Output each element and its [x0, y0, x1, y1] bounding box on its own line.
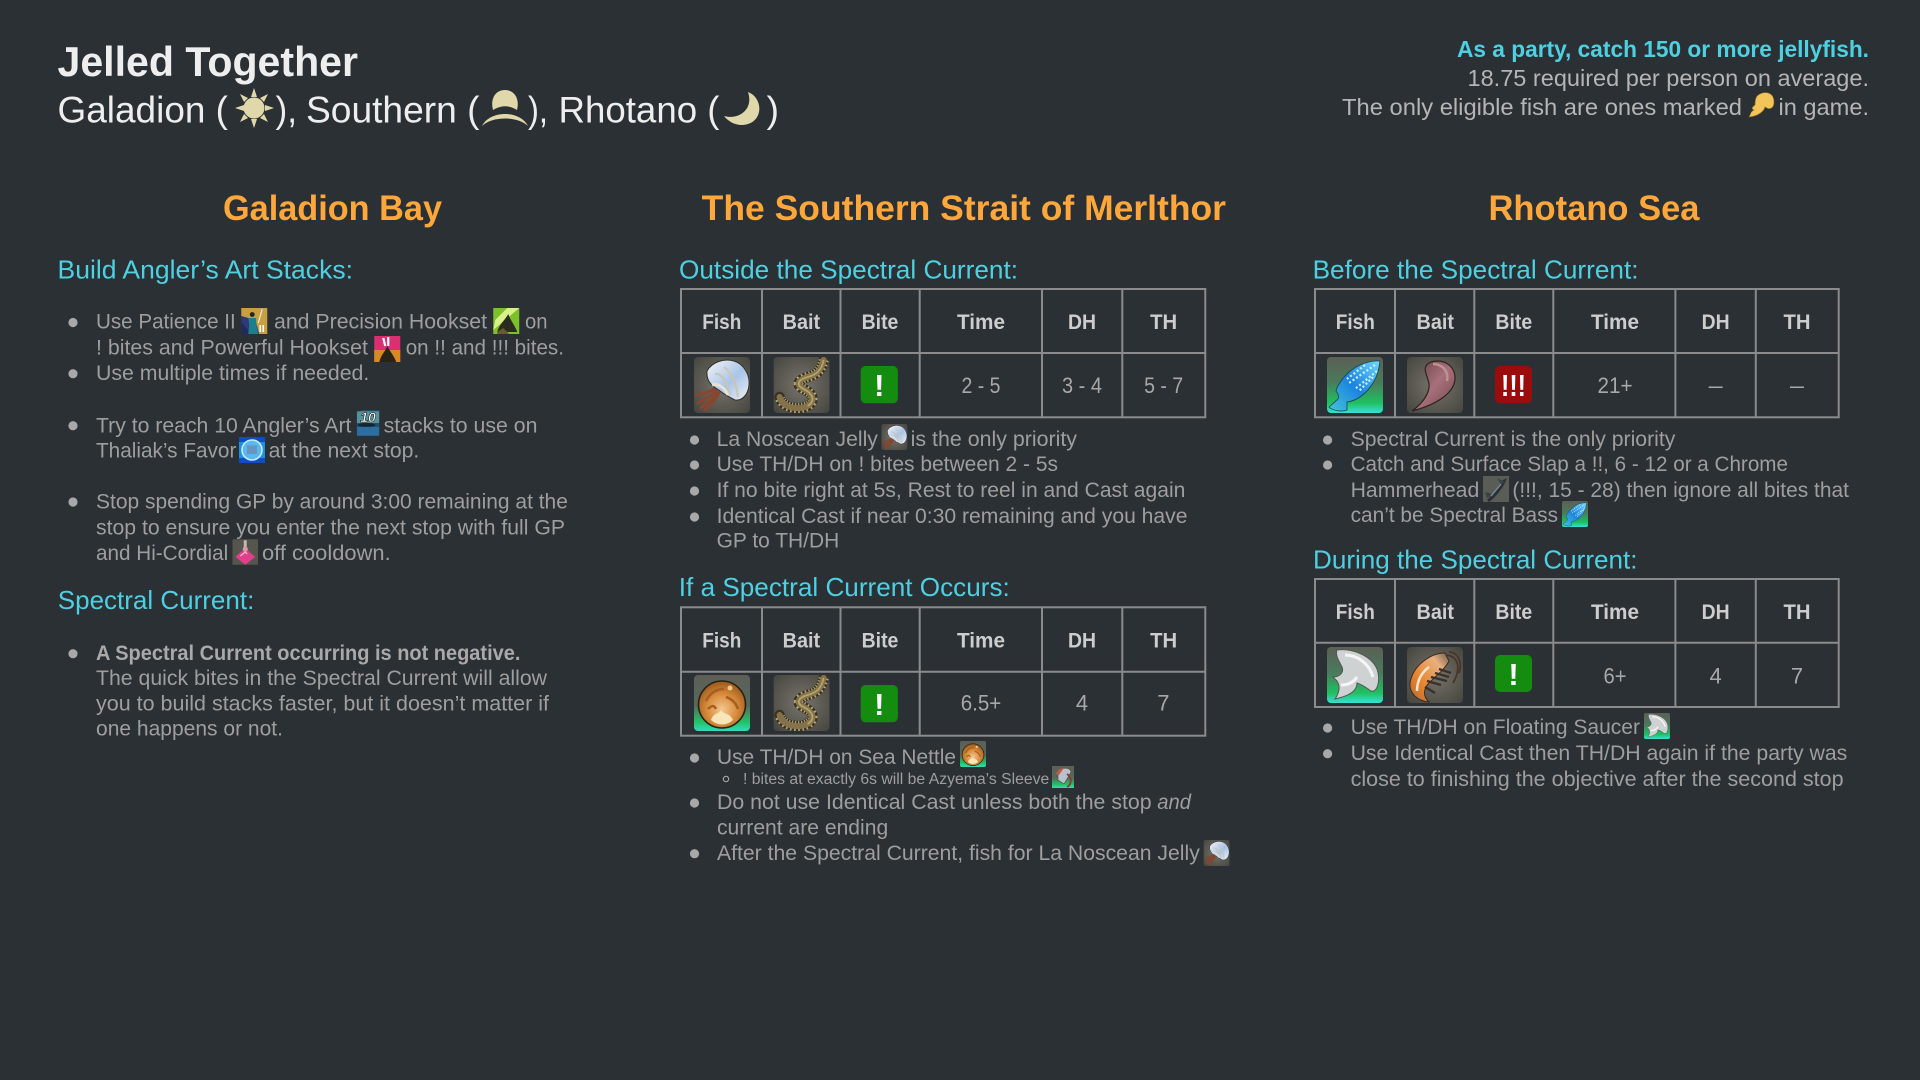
table: outside current: 3 - 4: [1062, 373, 1102, 398]
icon: light bite: !: [874, 368, 884, 403]
bullet list: during spectral current: Use TH/DH on Floating Saucer: [1351, 716, 1640, 739]
table: during spectral current: Time: [1591, 601, 1639, 624]
bullet list: outside current: Identical Cast if near 0:30 remaining and you have: [717, 505, 1188, 528]
table: before current: —: [1709, 373, 1723, 398]
icon: light bite: [1495, 655, 1532, 692]
bullet list: stacks: off cooldown.: [262, 542, 391, 565]
table: outside current: 5 - 7: [1144, 373, 1183, 398]
subtitle with weather icons: [58, 88, 779, 130]
bullet list: stacks: Use multiple times if needed.: [96, 362, 369, 385]
bullet list: stacks: at the next stop.: [269, 440, 419, 463]
table: during current: 4: [1076, 691, 1088, 716]
icon: heavy bite: !!!: [1501, 368, 1526, 403]
icon: Sea Nettle small: [960, 741, 986, 767]
panel: Galadion Bay: [58, 189, 568, 741]
bullet list: stacks: on !! and !!! bites.: [406, 336, 564, 360]
bullet list: spectral current: you to build stacks faster, but it doesn’t matter if: [96, 692, 549, 716]
bullet list: before current: Spectral Current is the only priority: [1351, 428, 1676, 451]
table: before current: 21+: [1598, 373, 1632, 398]
icon: Angler's Art: [357, 409, 379, 436]
table: outside current: DH: [1068, 311, 1096, 334]
table: outside current: 2 - 5: [962, 373, 1000, 398]
bullet list: before current: [1323, 428, 1849, 527]
bullet list: during spectral current: Use Identical Cast then TH/DH again if the party was: [1351, 742, 1847, 765]
subtitle with weather icons: Rhotano (: [558, 90, 720, 130]
bullet list: stacks: [68, 308, 568, 565]
table: before current: Bite: [1495, 311, 1532, 334]
table: before current: Bait: [1417, 311, 1454, 334]
table: during current: 7: [1157, 691, 1170, 716]
bullet list: stacks: and Precision Hookset: [274, 310, 487, 334]
icon: moon: [724, 92, 759, 125]
subtitle with weather icons: ): [766, 90, 779, 130]
bullet list: spectral current: [68, 642, 549, 741]
bullet list: stacks: stacks to use on: [384, 414, 538, 437]
subtitle with weather icons: Southern (: [306, 90, 480, 130]
panel: Southern Strait of Merlthor: [679, 189, 1230, 866]
bullet list: spectral current: A Spectral Current occurring is not negative.: [96, 642, 520, 665]
table: outside current: [681, 289, 1205, 417]
icon: leech bait: [1407, 357, 1463, 413]
heading: Southern Strait: The Southern Strait of Merlthor: [702, 189, 1226, 228]
title block: [58, 38, 779, 130]
title: Jelled Together: [58, 38, 358, 85]
bullet list: stacks: and Hi-Cordial: [96, 542, 228, 565]
table: before current: [1315, 289, 1839, 417]
subtitle with weather icons: Galadion (: [58, 90, 229, 130]
bullet list: spectral current: one happens or not.: [96, 718, 283, 741]
bullet list: stacks: ! bites and Powerful Hookset: [96, 336, 368, 360]
subheading: Before the Spectral Current:: [1313, 254, 1638, 284]
icon: Precision Hookset: [493, 308, 519, 334]
icon: light bite: !: [874, 687, 884, 722]
bullet list: during current: After the Spectral Current, fish for La Noscean Jelly: [717, 842, 1200, 865]
table: before current: Time: [1591, 311, 1639, 334]
icon: Spectral Bass small: [1562, 501, 1588, 527]
bullet list: during current: ! bites at exactly 6s will be Azyema’s Sleeve: [743, 771, 1049, 788]
icon: yellow jellyfish: [1749, 93, 1774, 117]
table: outside current: Bait: [783, 311, 820, 334]
bullet list: stacks: Try to reach 10 Angler’s Art: [96, 414, 352, 437]
bullet list: during current: Use TH/DH on Sea Nettle: [717, 746, 956, 769]
bullet list: stacks: Use Patience II: [96, 310, 236, 334]
table: during current: Time: [957, 629, 1005, 652]
bullet list: stacks: Thaliak’s Favor: [96, 440, 236, 463]
bullet list: before current: Hammerhead: [1351, 479, 1479, 502]
table: during current: Fish: [702, 629, 741, 652]
icon: worm bait: [774, 675, 830, 731]
bullet list: outside current: [690, 424, 1188, 553]
table: during current: Bait: [783, 629, 820, 652]
icon: Floating Saucer small: [1644, 713, 1670, 739]
table: outside current: Bite: [862, 311, 898, 334]
icon: Floating Saucer: [1327, 647, 1383, 703]
table: before current: TH: [1784, 311, 1810, 334]
heading: Rhotano Sea: Rhotano Sea: [1488, 189, 1700, 228]
subtitle with weather icons: ),: [276, 90, 297, 130]
icon: southern hat: [482, 90, 528, 126]
icon: Chrome Hammerhead: [1483, 476, 1509, 502]
icon: La Noscean Jelly: [694, 357, 750, 413]
objective note: As a party, catch 150 or more jellyfish.: [1457, 36, 1869, 62]
icon: La Noscean Jelly small: [1204, 840, 1230, 866]
table: during spectral current: 6+: [1604, 663, 1626, 688]
table: during current: 6.5+: [961, 691, 1001, 716]
bullet list: during spectral current: [1323, 713, 1847, 791]
bullet list: outside current: La Noscean Jelly: [717, 428, 878, 451]
table: during current: Bite: [862, 629, 898, 652]
icon: Thaliak's Favor: [239, 437, 265, 463]
bullet list: outside current: GP to TH/DH: [717, 530, 839, 553]
table: during spectral current: Bait: [1417, 601, 1454, 624]
icon: sun: [235, 88, 274, 128]
icon: shrimp bait: [1407, 647, 1463, 703]
table: during spectral current: 4: [1709, 663, 1722, 688]
bullet list: outside current: Use TH/DH on ! bites between 2 - 5s: [717, 453, 1058, 476]
icon: Azyema's Sleeve: [1052, 766, 1074, 788]
table: during spectral current: Bite: [1495, 601, 1532, 624]
objective note: The only eligible fish are ones marked: [1342, 94, 1742, 120]
bullet list: during current: and: [1157, 791, 1192, 814]
icon: Sea Nettle: [694, 675, 750, 731]
table: before current: DH: [1702, 311, 1730, 334]
bullet list: during current: [690, 741, 1230, 866]
table: outside current: Time: [957, 311, 1005, 334]
subtitle with weather icons: ),: [528, 90, 548, 130]
panel: Rhotano Sea: [1313, 189, 1849, 791]
bullet list: before current: (!!!, 15 - 28) then ignore all bites that: [1512, 479, 1849, 502]
table: during spectral current: Fish: [1336, 601, 1375, 624]
table: outside current: TH: [1150, 311, 1177, 334]
table: during spectral current: TH: [1784, 601, 1810, 624]
icon: light bite: !: [1508, 657, 1519, 692]
icon: Powerful Hookset: [374, 336, 400, 362]
bullet list: before current: can’t be Spectral Bass: [1351, 504, 1558, 527]
table: during current: [681, 607, 1205, 736]
icon: light bite: [861, 685, 898, 722]
subheading: Build Angler’s Art Stacks:: [58, 254, 353, 284]
icon: La Noscean Jelly small: [881, 424, 907, 450]
table: before current: Fish: [1336, 311, 1375, 334]
bullet list: during current: Do not use Identical Cast unless both the stop: [717, 791, 1152, 814]
icon: light bite: [861, 366, 898, 403]
bullet list: during spectral current: close to finishing the objective after the second stop: [1351, 768, 1844, 791]
subheading: If a Spectral Current Occurs:: [679, 572, 1010, 602]
table: during spectral current: [1315, 579, 1839, 707]
bullet list: outside current: is the only priority: [911, 428, 1077, 451]
icon: Hi-Cordial: [232, 539, 258, 565]
objective note: 18.75 required per person on average.: [1468, 65, 1869, 91]
bullet list: during current: current are ending: [717, 816, 888, 839]
bullet list: stacks: on: [525, 310, 548, 334]
objective note: [1342, 36, 1869, 120]
subheading: During the Spectral Current:: [1313, 544, 1638, 574]
table: during spectral current: DH: [1702, 601, 1730, 624]
table: during current: DH: [1068, 629, 1096, 652]
icon: Patience II: [241, 308, 267, 334]
bullet list: before current: Catch and Surface Slap a !!, 6 - 12 or a Chrome: [1351, 453, 1788, 476]
icon: worm bait: [774, 357, 830, 413]
table: during current: TH: [1150, 629, 1177, 652]
table: before current: —: [1790, 373, 1804, 398]
bullet list: stacks: Stop spending GP by around 3:00 remaining at the: [96, 490, 568, 513]
subheading: Spectral Current:: [58, 585, 254, 615]
heading: Galadion Bay: Galadion Bay: [223, 189, 443, 228]
icon: Angler's Art: 10: [360, 409, 376, 425]
subheading: Outside the Spectral Current:: [679, 254, 1018, 284]
icon: Spectral Bass: [1327, 357, 1383, 413]
table: outside current: Fish: [702, 311, 741, 334]
bullet list: spectral current: The quick bites in the Spectral Current will allow: [96, 667, 548, 690]
bullet list: stacks: stop to ensure you enter the next stop with full GP: [96, 516, 565, 539]
objective note: in game.: [1778, 94, 1869, 120]
bullet list: outside current: If no bite right at 5s, Rest to reel in and Cast again: [717, 479, 1185, 502]
table: during spectral current: 7: [1791, 663, 1803, 688]
